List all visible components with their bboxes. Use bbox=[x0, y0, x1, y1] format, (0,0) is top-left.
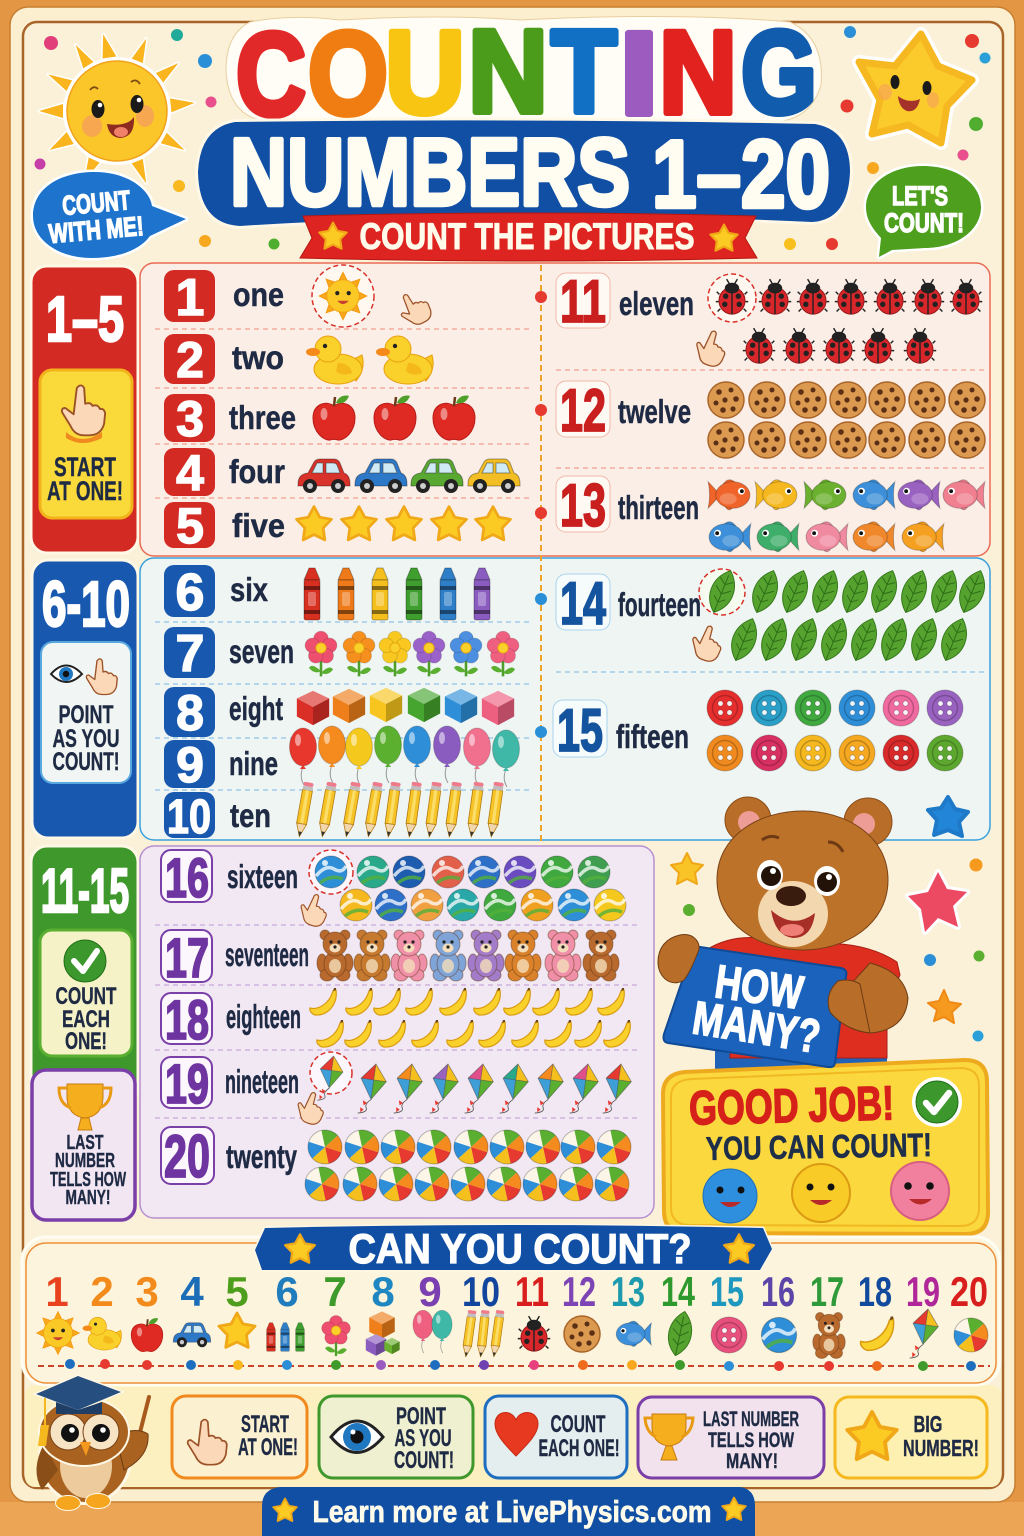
row 10: ten bbox=[164, 782, 504, 844]
footer: learn more link bbox=[262, 1487, 755, 1536]
title: COUNTING: G bbox=[741, 7, 817, 139]
numbers 1 to 20: 19 bbox=[906, 1268, 940, 1315]
row 19: nineteen: nineteen bbox=[225, 1063, 299, 1100]
picture icons 1 to 20 bbox=[37, 1306, 992, 1361]
tip card: last number tells how many: TELLS HOW bbox=[708, 1429, 794, 1452]
card: last number tells how many: LAST bbox=[66, 1132, 104, 1154]
callout: let's count bubble: COUNT! bbox=[884, 208, 964, 238]
row 9: nine: nine bbox=[229, 745, 278, 782]
character: teddy bear bbox=[706, 797, 900, 1072]
row 3: three: three bbox=[229, 399, 296, 436]
row 7: seven: seven bbox=[229, 633, 294, 670]
icons: smiling faces bbox=[703, 1162, 949, 1223]
row 12: twelve bbox=[556, 377, 985, 458]
card: count each one bbox=[40, 930, 132, 1056]
row 5: five: 5 bbox=[176, 498, 204, 554]
card: point as you count: AS YOU bbox=[52, 725, 120, 753]
numbers 1 to 20: 8 bbox=[371, 1268, 395, 1315]
row 14: fourteen: fourteen bbox=[618, 586, 701, 623]
numbers 1 to 20: 16 bbox=[761, 1268, 795, 1315]
sign: how many, held by bear paws: HOW bbox=[712, 954, 807, 1019]
row 4: four: 4 bbox=[176, 445, 204, 501]
row 10: ten: 10 bbox=[167, 791, 211, 844]
heading: 1-5: 1–5 bbox=[46, 283, 124, 355]
row 7: seven bbox=[164, 625, 519, 683]
tip card: point as you count bbox=[319, 1396, 473, 1478]
row 16: sixteen: 16 bbox=[165, 846, 209, 909]
numbers 1 to 20: 18 bbox=[858, 1268, 892, 1315]
row 11: eleven bbox=[556, 268, 982, 369]
row 6: six: 6 bbox=[176, 564, 204, 622]
heading: 6-10: 6-10 bbox=[42, 568, 130, 640]
callout: count with me bubble: COUNT bbox=[61, 185, 132, 221]
row 8: eight bbox=[164, 685, 514, 741]
row 2: two: two bbox=[232, 339, 284, 376]
row 6: six bbox=[164, 564, 490, 622]
card: point as you count bbox=[41, 642, 131, 783]
numbers 1 to 20: 20 bbox=[950, 1268, 988, 1315]
tip card: count each one bbox=[485, 1396, 627, 1478]
row 20: twenty: 20 bbox=[164, 1123, 210, 1190]
row 17: seventeen bbox=[161, 926, 619, 989]
character: owl teacher bbox=[36, 1376, 149, 1510]
card: last number tells how many: TELLS HOW bbox=[50, 1169, 126, 1191]
heading: 11-15: 11-15 bbox=[41, 857, 129, 926]
row 18: eighteen bbox=[161, 988, 630, 1051]
tip card: big number bbox=[835, 1397, 987, 1478]
tip card: count each one: COUNT bbox=[550, 1411, 606, 1438]
row 2: two: 2 bbox=[176, 332, 204, 388]
callout: let's count bubble: LET'S bbox=[892, 181, 948, 211]
card: last number tells how many bbox=[32, 1070, 135, 1220]
title: COUNTING: U bbox=[385, 7, 465, 139]
row 3: three bbox=[164, 391, 475, 447]
card: last number tells how many: MANY! bbox=[66, 1187, 110, 1209]
icon: smiling star bbox=[859, 34, 972, 143]
row 13: thirteen: thirteen bbox=[618, 489, 699, 526]
dotted counting line bbox=[38, 1359, 990, 1371]
title: COUNTING: T bbox=[551, 6, 617, 138]
tip card: last number tells how many: LAST NUMBER bbox=[703, 1408, 799, 1431]
footer: learn more link: Learn more at LivePhysics.com bbox=[312, 1494, 712, 1529]
card: count each one: COUNT bbox=[56, 983, 117, 1010]
lower band background bbox=[25, 1385, 1001, 1487]
row 8: eight: 8 bbox=[176, 685, 204, 741]
numbers 1 to 20: 10 bbox=[462, 1268, 500, 1315]
panel: blue numbers 6-10 and 14-15 bbox=[140, 558, 990, 840]
tip card: start at one: AT ONE! bbox=[238, 1434, 298, 1461]
row 5: five: five bbox=[232, 507, 285, 544]
row 15: fifteen bbox=[553, 690, 963, 771]
numbers 1 to 20: 3 bbox=[135, 1268, 159, 1315]
subtitle ribbon: count the pictures: COUNT THE PICTURES bbox=[360, 216, 694, 257]
center dashed divider bbox=[535, 265, 547, 845]
tip card: start at one bbox=[172, 1396, 307, 1478]
tip card: last number tells how many: MANY! bbox=[726, 1450, 778, 1473]
row 17: seventeen: seventeen bbox=[225, 936, 309, 973]
callout: count with me bubble: WITH ME! bbox=[48, 211, 145, 249]
row 13: thirteen bbox=[556, 472, 985, 552]
numbers 1 to 20: 13 bbox=[611, 1268, 645, 1315]
panel: group 1-5 tab bbox=[31, 266, 138, 553]
row 7: seven: 7 bbox=[176, 625, 204, 683]
row 13: thirteen: 13 bbox=[560, 472, 606, 539]
numbers 1 to 20: 4 bbox=[180, 1268, 204, 1315]
row 14: fourteen: 14 bbox=[560, 570, 606, 637]
row 14: fourteen bbox=[556, 566, 991, 665]
card: point as you count: COUNT! bbox=[52, 748, 120, 776]
title: COUNTING: O bbox=[308, 8, 388, 140]
numbers 1 to 20: 14 bbox=[661, 1268, 695, 1315]
card: start at one: AT ONE! bbox=[47, 476, 123, 506]
row 11: eleven: eleven bbox=[619, 285, 694, 322]
row 11: eleven: 11 bbox=[560, 268, 606, 335]
callout: let's count bubble bbox=[866, 166, 981, 257]
numbers 1 to 20: 2 bbox=[90, 1268, 114, 1315]
numbers 1 to 20: 7 bbox=[323, 1268, 347, 1315]
row 19: nineteen bbox=[161, 1052, 634, 1127]
numbers 1 to 20: 17 bbox=[810, 1268, 844, 1315]
sign: how many, held by bear paws: MANY? bbox=[689, 991, 824, 1063]
panel: can you count number line bbox=[22, 1225, 1000, 1385]
row 10: ten: ten bbox=[230, 797, 271, 834]
row 15: fifteen: fifteen bbox=[616, 718, 689, 755]
row 18: eighteen: 18 bbox=[165, 988, 209, 1051]
row 2: two bbox=[164, 332, 433, 388]
title: COUNTING: N bbox=[468, 6, 548, 138]
panel: good job bbox=[663, 1060, 988, 1234]
text: you can count: YOU CAN COUNT! bbox=[705, 1126, 932, 1167]
row 4: four: four bbox=[229, 453, 285, 490]
row 18: eighteen: eighteen bbox=[226, 998, 301, 1035]
row 8: eight: eight bbox=[229, 690, 283, 727]
card: start at one bbox=[40, 370, 132, 518]
title: COUNTING bbox=[226, 6, 821, 141]
row 1: one: 1 bbox=[176, 269, 204, 327]
icon: green check bbox=[912, 1077, 962, 1127]
row 9: nine bbox=[164, 726, 520, 793]
title banner: NUMBERS 1-20: NUMBERS bbox=[230, 119, 630, 226]
decorative stars and dots near the bear bbox=[671, 853, 984, 1042]
numbers 1 to 20: 11 bbox=[515, 1268, 549, 1315]
row 16: sixteen: sixteen bbox=[227, 858, 298, 895]
card: start at one: START bbox=[54, 452, 116, 482]
card: count each one: EACH bbox=[62, 1006, 110, 1033]
row 9: nine: 9 bbox=[176, 737, 204, 793]
tip card: point as you count: COUNT! bbox=[394, 1447, 454, 1474]
numbers 1 to 20: 15 bbox=[710, 1268, 744, 1315]
title: COUNTING: N bbox=[659, 7, 737, 139]
row 20: twenty: twenty bbox=[226, 1138, 297, 1175]
row 16: sixteen bbox=[161, 846, 626, 929]
numbers 1 to 20: 1 bbox=[45, 1268, 69, 1315]
confetti dots bbox=[34, 26, 990, 250]
numbers 1 to 20: 5 bbox=[225, 1268, 249, 1315]
banner: can you count: CAN YOU COUNT? bbox=[348, 1225, 692, 1272]
row 19: nineteen: 19 bbox=[165, 1052, 209, 1115]
numbers 1 to 20: 12 bbox=[562, 1268, 596, 1315]
tip card: start at one: START bbox=[241, 1411, 289, 1438]
title: COUNTING: I bbox=[619, 8, 659, 140]
tip card: big number: NUMBER! bbox=[903, 1435, 979, 1461]
tip card: point as you count: POINT bbox=[396, 1403, 446, 1430]
row 12: twelve: twelve bbox=[618, 393, 691, 430]
row 1: one: one bbox=[233, 276, 284, 313]
tip card: big number: BIG bbox=[914, 1411, 942, 1437]
row 6: six: six bbox=[230, 571, 269, 608]
tip card: last number tells how many bbox=[638, 1397, 824, 1478]
panel: group 11-15 tab bbox=[31, 846, 138, 1104]
panel: purple numbers 16-20 bbox=[140, 846, 654, 1218]
card: count each one: ONE! bbox=[65, 1028, 107, 1055]
card: last number tells how many: NUMBER bbox=[55, 1150, 115, 1172]
row 15: fifteen: 15 bbox=[557, 697, 603, 764]
icon: big smiling sun bbox=[39, 33, 195, 186]
panel: group 6-10 tab bbox=[32, 560, 138, 838]
callout: count with me bubble bbox=[33, 172, 186, 258]
title banner: NUMBERS 1-20: 1–20 bbox=[652, 121, 830, 228]
numbers 1 to 20 bbox=[45, 1268, 988, 1315]
row 1: one bbox=[164, 265, 435, 330]
card: point as you count: POINT bbox=[58, 701, 114, 729]
tip card: point as you count: AS YOU bbox=[394, 1425, 452, 1452]
icon: blue star bbox=[928, 797, 968, 836]
row 17: seventeen: 17 bbox=[165, 926, 209, 989]
sign: how many, held by bear paws bbox=[658, 935, 908, 1067]
title: COUNTING: C bbox=[236, 9, 306, 141]
row 3: three: 3 bbox=[176, 391, 204, 447]
tip card: count each one: EACH ONE! bbox=[538, 1435, 620, 1462]
row 5: five bbox=[164, 498, 510, 554]
row 20: twenty bbox=[161, 1123, 635, 1205]
panel: red numbers 1-5 and 11-13 bbox=[140, 263, 990, 556]
numbers 1 to 20: 9 bbox=[418, 1268, 442, 1315]
row 12: twelve: 12 bbox=[560, 377, 606, 444]
numbers 1 to 20: 6 bbox=[275, 1268, 299, 1315]
row 4: four bbox=[164, 445, 520, 501]
heading: good job: GOOD JOB! bbox=[688, 1077, 895, 1136]
